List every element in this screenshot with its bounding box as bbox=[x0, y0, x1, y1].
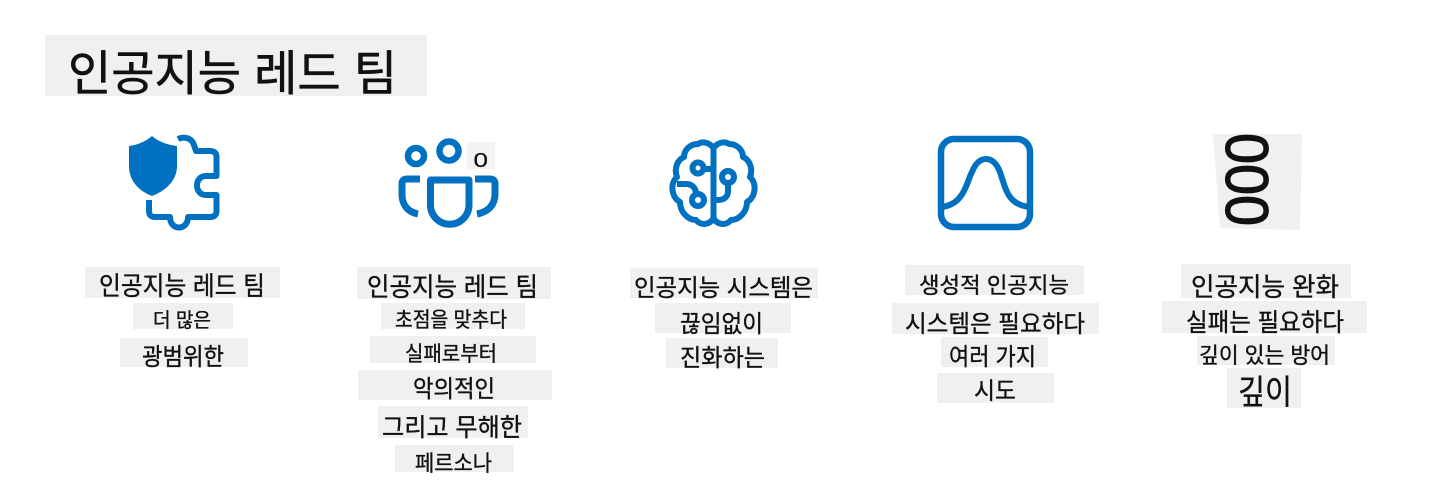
column: evolving systems bbox=[630, 142, 818, 372]
column: red team scope bbox=[85, 136, 280, 371]
label line: 더 많은 bbox=[153, 309, 211, 332]
label line bbox=[120, 338, 248, 371]
icon: shield and puzzle piece bbox=[129, 136, 216, 228]
label line: 광범위한 bbox=[142, 344, 224, 371]
label line bbox=[666, 338, 778, 372]
label line: 페르소나 bbox=[415, 451, 492, 476]
label line bbox=[133, 303, 233, 332]
label line: 인공지능 완화 bbox=[1191, 272, 1339, 302]
label line: 인공지능 시스템은 bbox=[634, 275, 813, 302]
label line: 초점을 맞추다 bbox=[395, 309, 507, 332]
icon: circuit brain bbox=[672, 142, 755, 224]
column: failure focus bbox=[357, 142, 552, 476]
icon: people group: 0 bbox=[474, 149, 488, 171]
label line: 실패는 필요하다 bbox=[1186, 309, 1344, 337]
label line: 악의적인 bbox=[413, 376, 495, 403]
label line bbox=[381, 303, 525, 332]
label line bbox=[358, 370, 552, 403]
label line: 생성적 인공지능 bbox=[919, 273, 1069, 298]
label line: 깊이 있는 방어 bbox=[1199, 343, 1330, 368]
label line: 끊임없이 bbox=[680, 311, 763, 338]
label line: 인공지능 레드 팀 bbox=[99, 271, 265, 301]
label line: 여러 가지 bbox=[949, 344, 1036, 371]
label line: 시도 bbox=[974, 378, 1016, 405]
icon: bell curve in a square bbox=[941, 139, 1030, 227]
label line bbox=[937, 373, 1054, 405]
label line: 실패로부터 bbox=[405, 343, 497, 366]
label line: 인공지능 레드 팀 bbox=[367, 272, 538, 302]
label line: 진화하는 bbox=[680, 345, 765, 372]
column: defense in depth bbox=[1162, 133, 1367, 412]
label line: 시스템은 필요하다 bbox=[905, 311, 1085, 338]
label line bbox=[370, 336, 536, 366]
column: generative AI attempts bbox=[892, 139, 1099, 405]
label line bbox=[1162, 301, 1367, 337]
label line: 깊이 bbox=[1238, 374, 1292, 412]
label line: 그리고 무해한 bbox=[382, 414, 522, 442]
icon: three rotated zeros: 000 bbox=[1213, 133, 1280, 226]
label line bbox=[395, 445, 514, 476]
title: 인공지능 레드 팀 bbox=[68, 48, 397, 101]
label line bbox=[905, 265, 1084, 298]
icon: people group bbox=[402, 142, 495, 224]
label line bbox=[655, 303, 791, 338]
label line bbox=[892, 303, 1099, 338]
